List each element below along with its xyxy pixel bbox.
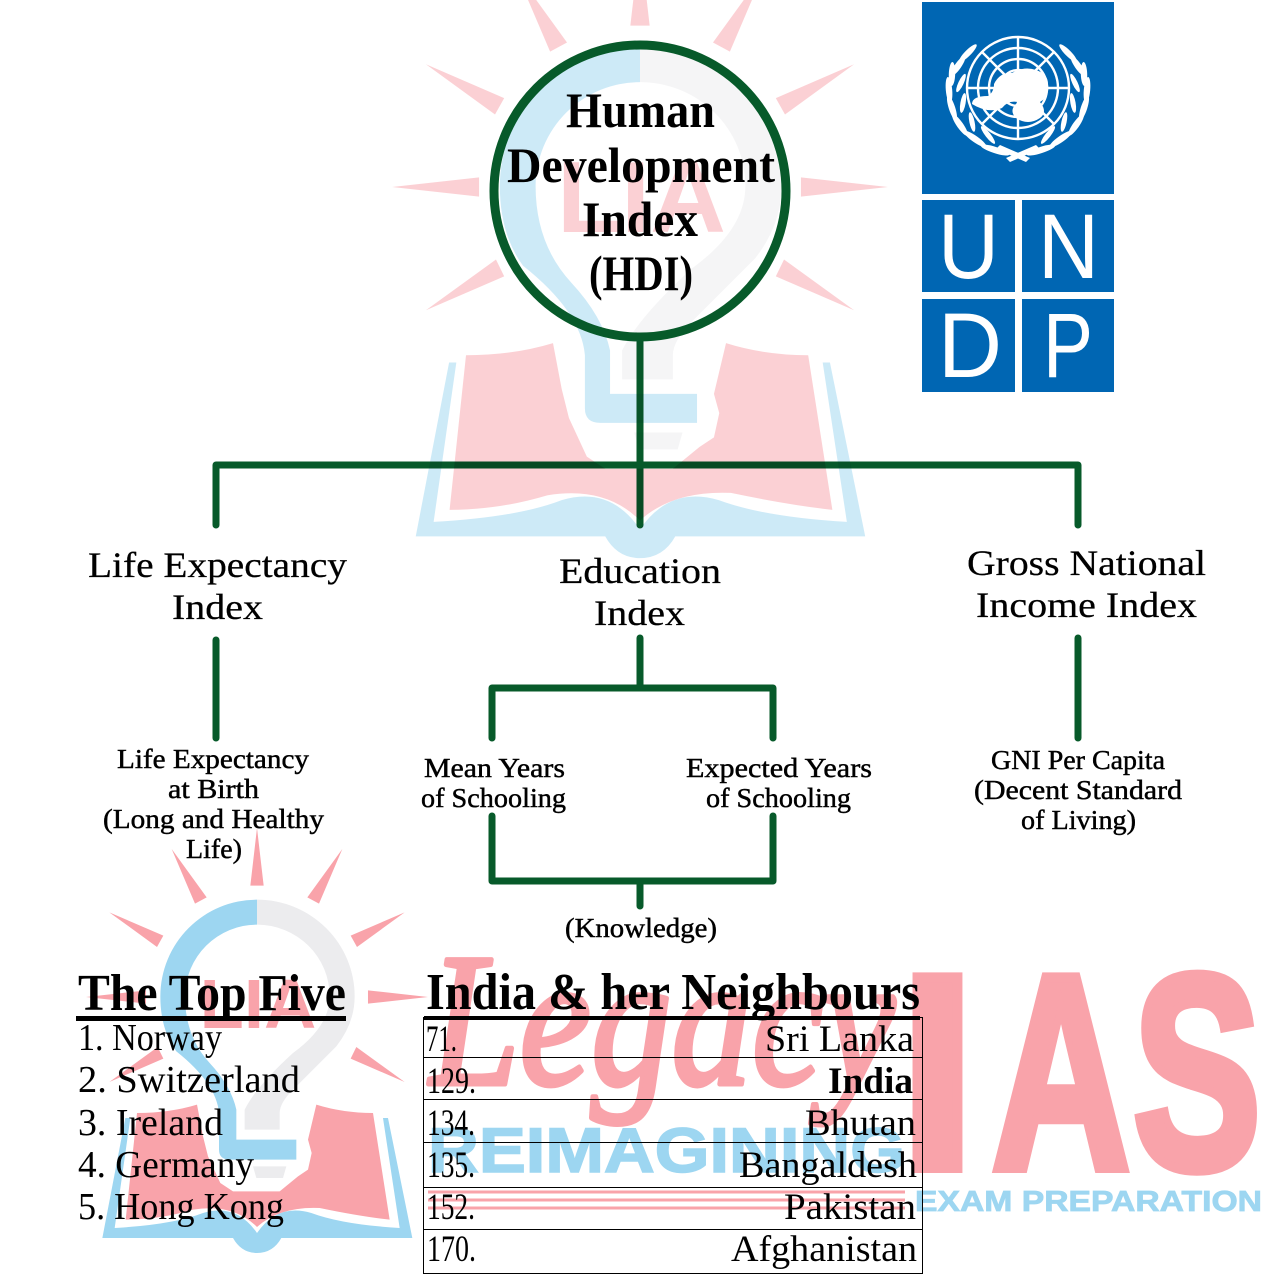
heading underline (424, 1016, 920, 1020)
watermark: Legacy IAS wordmark (427, 916, 1262, 1227)
emblem globe rings (967, 37, 1069, 139)
title: Human Development Index (HDI) (507, 82, 775, 301)
heading underline (76, 1016, 346, 1021)
logo: UN emblem (945, 37, 1091, 162)
watermark word: IAS: A (992, 917, 1130, 1227)
watermark word: IAS: I (899, 917, 976, 1227)
table grid (424, 1018, 922, 1274)
title: Human Development Index (HDI): Index (582, 191, 698, 247)
heading: Life Expectancy Index: Index (172, 587, 263, 627)
text: Life Expectancy at Birth: Life) (186, 834, 242, 864)
text: Life Expectancy at Birth: at Birth (168, 774, 260, 804)
table countries: Sri Lanka (765, 1019, 914, 1060)
list of countries: 4. Germany (78, 1144, 254, 1186)
table countries: India (828, 1061, 913, 1102)
watermark: bottom lightbulb and book logo (86, 828, 428, 1253)
text: Mean Years of Schooling: Mean Years (424, 753, 565, 783)
UNDP logo (922, 2, 1114, 397)
heading: Life Expectancy Index (88, 545, 347, 627)
text: Expected Years of Schooling: of Schooling (706, 783, 851, 813)
title: Human Development Index (HDI): (HDI) (589, 245, 693, 301)
logo: D cell: D (938, 295, 1002, 397)
list of countries: 3. Ireland (78, 1102, 223, 1144)
heading: Gross National Income Index (967, 543, 1206, 625)
list of countries (78, 1017, 300, 1228)
heading: The Top Five: The Top Five (78, 965, 346, 1022)
list of countries: 5. Hong Kong (78, 1186, 284, 1228)
HDI circle (494, 45, 786, 337)
logo: P cell (1022, 295, 1114, 397)
logo: N cell: N (1038, 196, 1099, 298)
heading: Life Expectancy Index: Life Expectancy (88, 545, 347, 585)
text: Life Expectancy at Birth: (Long and Healthy (103, 804, 325, 834)
table ranks: 170. (427, 1229, 476, 1270)
panel: India and her Neighbours (424, 964, 922, 1274)
text: Expected Years of Schooling (686, 753, 872, 813)
emblem continents (972, 69, 1048, 122)
text: Life Expectancy at Birth (103, 744, 325, 864)
list of countries: 1. Norway (78, 1017, 222, 1059)
heading: Education Index (559, 551, 721, 633)
table countries: Bhutan (805, 1103, 916, 1144)
connector lines: tree diagram (216, 340, 1078, 906)
text: Expected Years of Schooling: Expected Years (686, 753, 872, 783)
text: Mean Years of Schooling: of Schooling (421, 783, 566, 813)
table ranks: 134. (427, 1103, 475, 1144)
table ranks (426, 1019, 476, 1270)
title: Human Development Index (HDI): Development (507, 137, 775, 193)
table countries: Afghanistan (731, 1229, 917, 1270)
table countries: Bangaldesh (739, 1145, 918, 1186)
table ranks: 129. (427, 1061, 476, 1102)
emblem laurel wreath right (1006, 42, 1091, 162)
emblem laurel wreath left (945, 42, 1030, 162)
logo: U cell: U (938, 196, 999, 298)
heading: Gross National Income Index: Income Index (976, 585, 1197, 625)
table ranks: 71. (426, 1019, 457, 1060)
table ranks: 135. (427, 1145, 475, 1186)
table ranks: 152. (427, 1187, 475, 1228)
text: GNI Per Capita: GNI Per Capita (991, 745, 1165, 775)
watermark: top lightbulb and book logo (392, 0, 888, 558)
heading: India & her Neighbours: India & her Neighbours (426, 964, 920, 1021)
text: GNI Per Capita (974, 745, 1183, 835)
text: Life Expectancy at Birth: Life Expectancy (117, 744, 310, 774)
heading: Education Index: Education (559, 551, 721, 591)
logo: blue emblem panel (922, 2, 1114, 194)
logo: P cell: P (1043, 295, 1093, 397)
watermark word: IAS (899, 917, 1261, 1227)
text: Knowledge: (Knowledge) (565, 913, 717, 943)
heading: Education Index: Index (594, 593, 685, 633)
heading: Gross National Income Index: Gross National (967, 543, 1206, 583)
table countries: Pakistan (784, 1187, 916, 1228)
watermark stripes (428, 1192, 905, 1208)
watermark word: Legacy: Legacy (427, 916, 896, 1126)
watermark word: REIMAGINING: REIMAGINING (428, 1116, 905, 1186)
watermark: bottom lightbulb and book logo: LIA (200, 965, 316, 1043)
title: Human Development Index (HDI): Human (566, 82, 715, 138)
watermark: top lightbulb and book logo: LIA (557, 140, 726, 254)
text: Mean Years of Schooling (421, 753, 566, 813)
table countries (731, 1019, 918, 1270)
text: GNI Per Capita: of Living) (1021, 805, 1136, 835)
watermark word: EXAM PREPARATION: EXAM PREPARATION (915, 1186, 1262, 1218)
text: GNI Per Capita: (Decent Standard (974, 775, 1183, 805)
panel: The Top Five (76, 965, 346, 1228)
list of countries: 2. Switzerland (78, 1059, 300, 1101)
